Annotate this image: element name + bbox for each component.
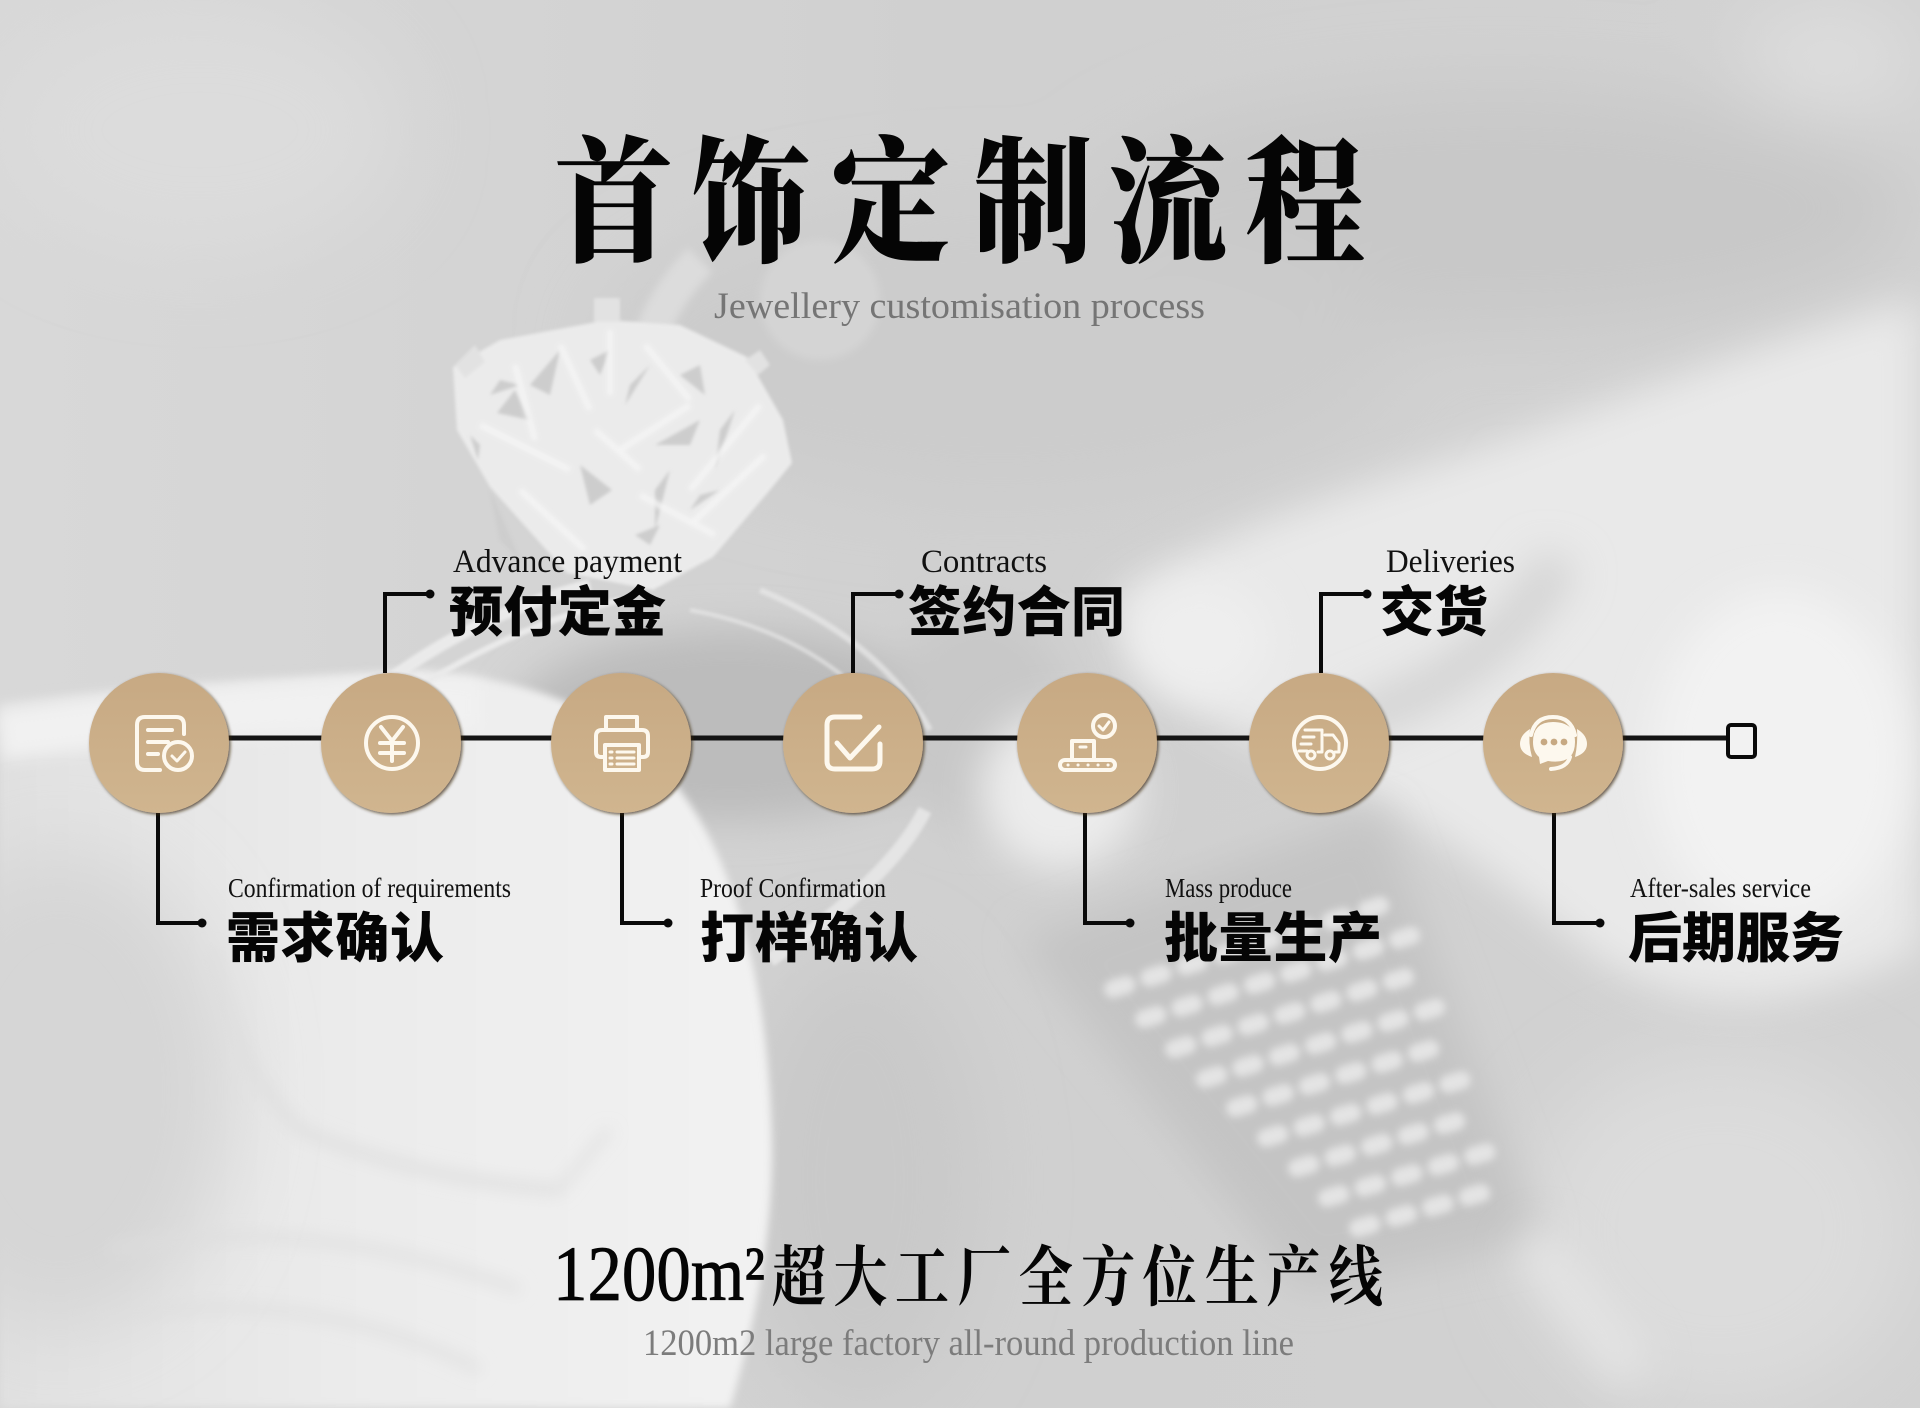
step 6 label: Deliveries: [1386, 544, 1515, 580]
step 5 label: Mass produce: [1165, 873, 1292, 903]
thumb: [0, 670, 772, 1408]
step 2 label: [449, 544, 682, 643]
bottom heading: 超大工厂全方位生产线: [772, 1242, 1383, 1315]
step 6 label: 交货: [1380, 583, 1488, 643]
bottom subtitle: 1200m2 large factory all-round production line: [643, 1323, 1294, 1364]
second ring finger: [980, 710, 1140, 870]
step 7 label: After-sales service: [1630, 873, 1811, 903]
step 5 label: 批量生产: [1164, 909, 1382, 969]
step 7 label: 后期服务: [1628, 909, 1844, 969]
step 2 circle with yen icon: [321, 673, 461, 813]
step 1 circle with document icon: [89, 673, 229, 813]
ring interior shade: [510, 610, 1070, 830]
step 4 label: Contracts: [921, 544, 1047, 580]
step 2 label: Advance payment: [453, 544, 682, 580]
step 6 circle with delivery truck icon: [1249, 673, 1389, 813]
step 3 label: 打样确认: [700, 909, 918, 969]
ring band: [340, 585, 930, 960]
bottom heading: 1200m²: [553, 1230, 765, 1317]
rope ring shade: [1020, 810, 1540, 1290]
step 3 label: Proof Confirmation: [700, 873, 886, 903]
rope ring beads: [1113, 899, 1499, 1228]
connector: step 2: [385, 590, 434, 673]
step 4 circle with checkbox icon: [783, 673, 923, 813]
end square marker: [1728, 725, 1755, 757]
step 7 label: [1628, 873, 1844, 969]
bottom streak: [1530, 1240, 1635, 1375]
title backdrop streak and bubble: [640, 240, 880, 380]
step 1 label: Confirmation of requirements: [228, 873, 511, 903]
step 3 circle with printer icon: [551, 673, 691, 813]
connector: step 5: [1085, 813, 1134, 928]
bottom heading: [553, 1230, 1383, 1317]
connector: step 3: [622, 813, 672, 928]
connector: step 6: [1321, 590, 1372, 673]
diamond: [453, 298, 792, 590]
connector: step 4: [853, 590, 904, 673]
connector: step 7: [1554, 813, 1604, 928]
step 1 label: 需求确认: [226, 909, 444, 969]
step 5 circle with conveyor icon: [1017, 673, 1157, 813]
step 7 circle with headset chat icon: [1483, 673, 1623, 813]
right finger: [1110, 300, 1920, 1000]
connector: step 1: [158, 813, 206, 928]
timeline line: [159, 736, 1728, 740]
step 4 label: 签约合同: [908, 583, 1125, 643]
subtitle: Jewellery customisation process: [714, 286, 1205, 327]
step 1 label: [226, 873, 511, 969]
main title: 首饰定制流程: [554, 129, 1365, 281]
step 6 label: [1380, 544, 1515, 643]
step 5 label: [1164, 873, 1382, 969]
step 3 label: [700, 873, 918, 969]
step 2 label: 预付定金: [449, 583, 666, 643]
step 4 label: [908, 544, 1125, 643]
